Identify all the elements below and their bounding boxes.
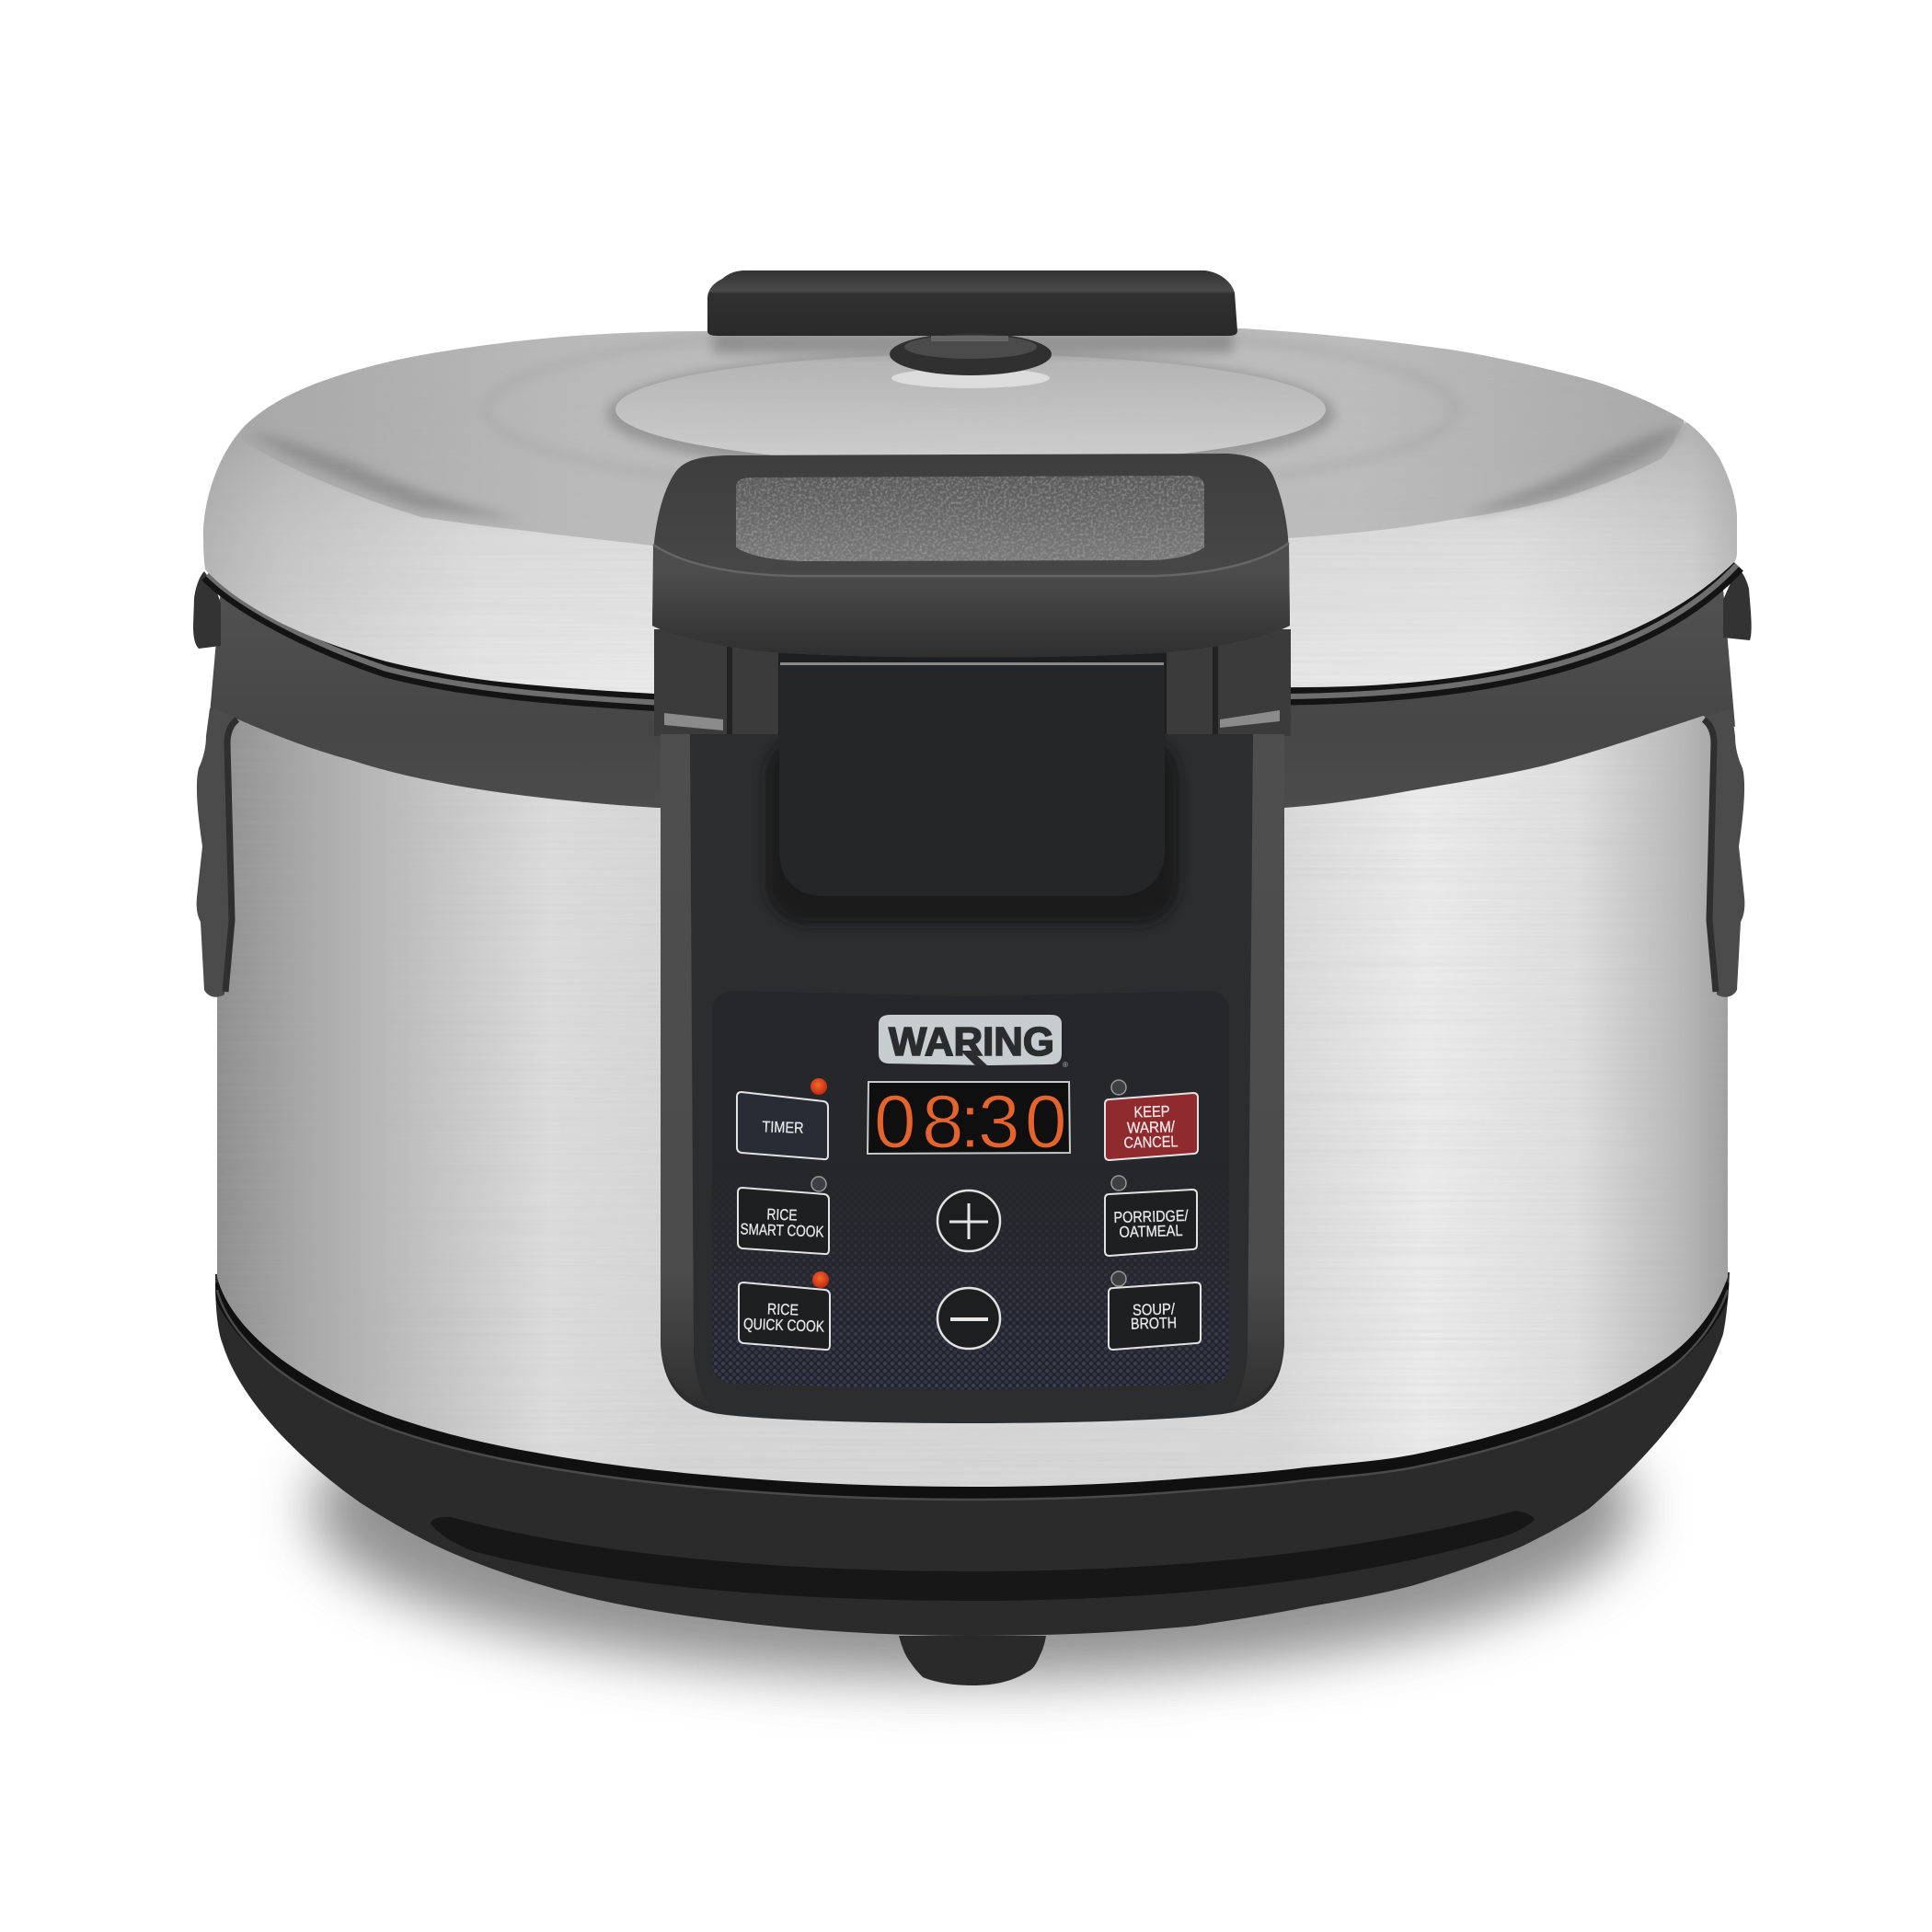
button: rice smart cook [738, 1188, 829, 1254]
handle grip inset [736, 476, 1204, 561]
lid seal [208, 565, 1737, 703]
Waring logo: ® [1063, 1061, 1068, 1069]
Waring logo: WARING [889, 1019, 1054, 1064]
left side handle [197, 708, 237, 997]
button: rice quick cook: QUICK COOK [743, 1315, 825, 1336]
front control housing [661, 734, 1284, 1423]
LED: rice smart cook off [811, 1177, 826, 1191]
button: keep warm cancel: WARM/ [1127, 1118, 1175, 1137]
floor shadow [311, 1339, 1636, 1679]
button: rice quick cook: RICE [767, 1300, 799, 1319]
right latch tab [1723, 568, 1752, 640]
plus button [937, 1190, 1000, 1251]
control panel [712, 991, 1229, 1390]
front latch handle [652, 454, 1290, 657]
stainless steel body [212, 699, 1733, 1500]
button: rice quick cook [739, 1282, 830, 1350]
button: rice smart cook: SMART COOK [740, 1220, 824, 1241]
black base [207, 1270, 1739, 1638]
steam vent knob [890, 333, 1052, 388]
latch flap [779, 662, 1165, 896]
rice cooker [193, 270, 1752, 1685]
front hinge right [1167, 629, 1291, 736]
button: porridge oatmeal [1105, 1190, 1197, 1256]
button: soup broth: BROTH [1131, 1314, 1177, 1333]
button: porridge oatmeal: OATMEAL [1119, 1222, 1183, 1241]
minus button [937, 1288, 1000, 1349]
button: timer: TIMER [762, 1118, 804, 1137]
button: soup broth [1109, 1282, 1201, 1350]
timer display: 08:30 [874, 1080, 1067, 1164]
button: keep warm cancel: CANCEL [1123, 1133, 1179, 1152]
lid top surface [242, 313, 1684, 546]
button: porridge oatmeal: PORRIDGE/ [1113, 1207, 1189, 1226]
button: keep warm cancel: KEEP [1133, 1102, 1170, 1121]
LED: rice quick cook on [812, 1271, 829, 1288]
front hinge left [654, 629, 778, 736]
latch recess [764, 626, 1178, 745]
LED: porridge off [1111, 1176, 1126, 1190]
rear handle [707, 270, 1237, 353]
foot [899, 1636, 1046, 1685]
lid [198, 313, 1743, 699]
button: keep warm cancel [1105, 1093, 1198, 1160]
right side handle [1704, 708, 1744, 997]
LED: keep warm off [1111, 1080, 1126, 1095]
lid centre disc [606, 351, 1335, 477]
left latch tab [193, 571, 221, 649]
LED: timer on [811, 1078, 827, 1095]
collar band [210, 589, 1735, 808]
button: timer [737, 1092, 828, 1159]
button: soup broth: SOUP/ [1133, 1300, 1175, 1319]
LED: soup off [1111, 1271, 1126, 1286]
button: rice smart cook: RICE [766, 1205, 798, 1225]
